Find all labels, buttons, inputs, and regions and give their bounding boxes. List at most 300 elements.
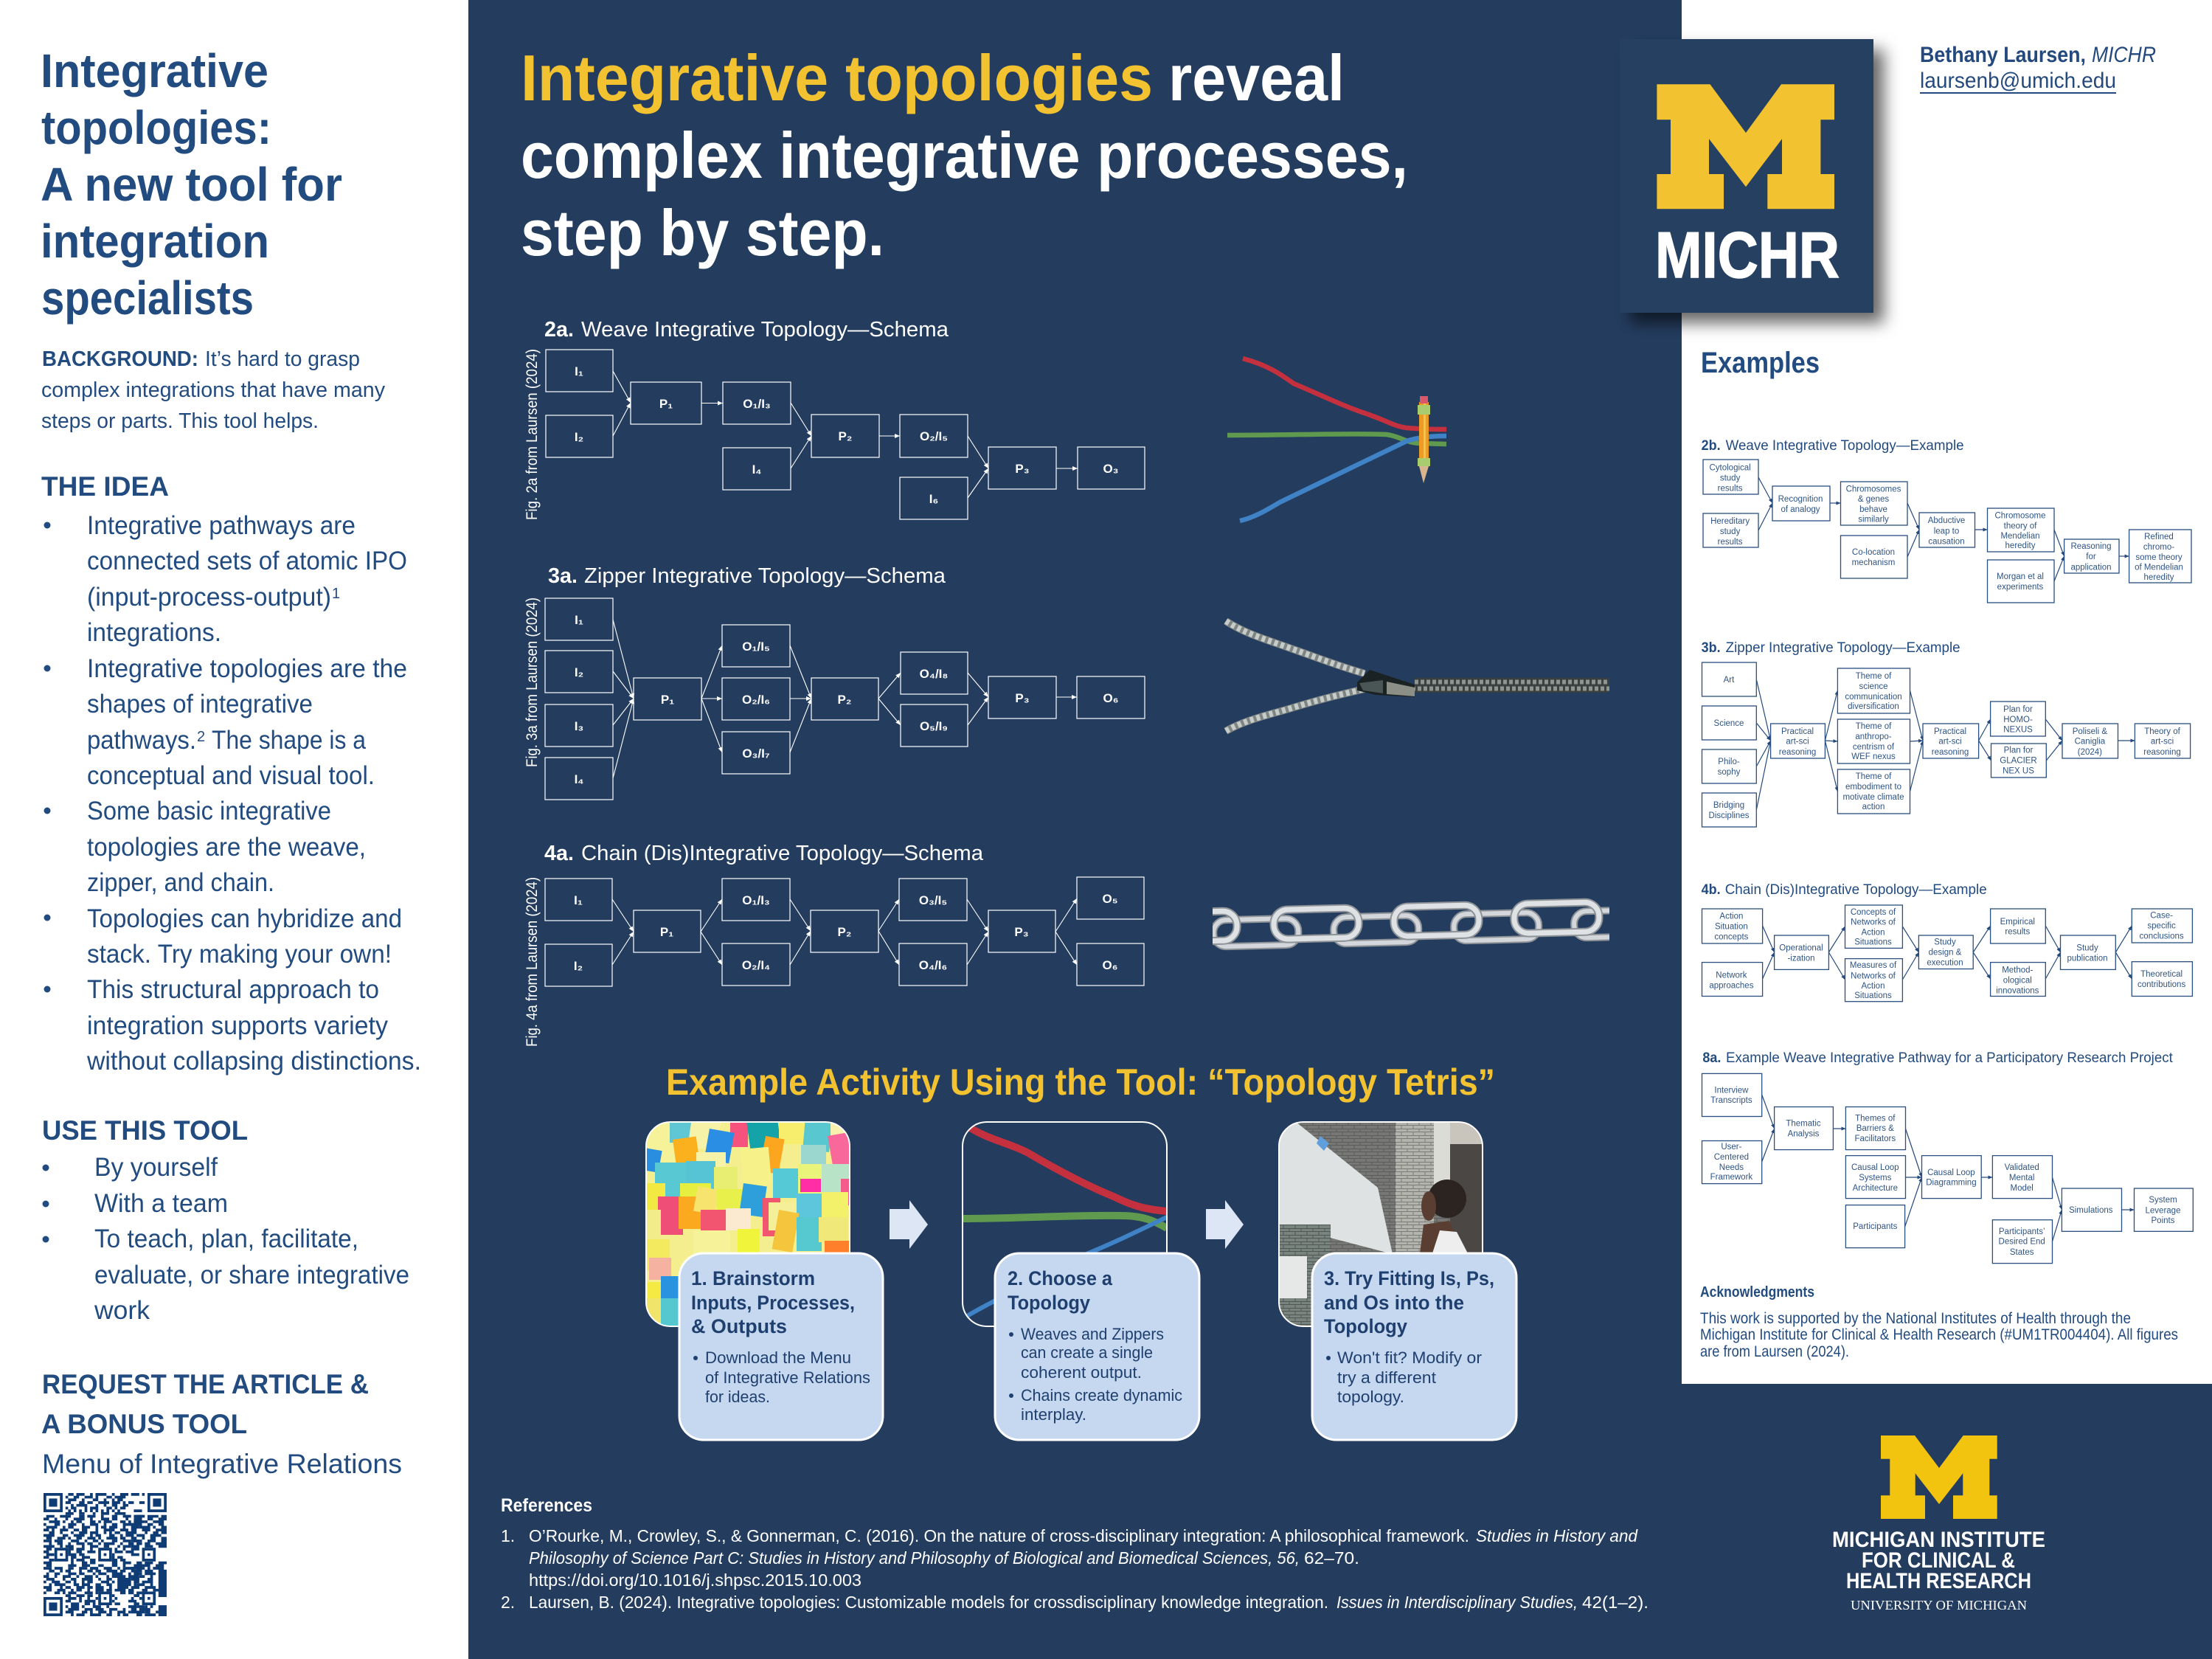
box practical 2: Practical [1934,727,1966,736]
image: zipper [1226,621,1609,731]
caption 8a: 8a. [1702,1050,1721,1066]
card 2: choose a topology [995,1253,1199,1440]
box methodological [1991,963,2045,996]
box glacier nexus: GLACIER [2000,757,2037,766]
box co-location: mechanism [1852,558,1895,567]
box science [1702,706,1756,740]
box O1/I3 [723,382,791,424]
box concepts: Situations [1854,938,1892,946]
box O1/I5: O₁/I₅ [742,640,770,654]
box morgan: Morgan et al [1997,572,2044,581]
box theory [2135,724,2191,758]
connectors 4b [1763,926,2132,980]
background text: complex integrations that have many [41,378,385,402]
box P2 [811,678,878,720]
the idea bullet list: Some basic integrative [87,797,331,825]
box bridging disciplines: Bridging [1713,801,1744,810]
card 1 heading [691,1267,855,1337]
reference 2: 2. [501,1593,515,1612]
reference 2: Laursen, B. (2024). Integrative topologies: Customizable models for crossdisciplinary knowledge integration. [529,1593,1328,1612]
figure 2b: weave example [1702,438,2191,603]
the idea bullet list: conceptual and visual tool. [87,761,375,790]
box interview [1702,1073,1762,1117]
headline: reveal [1168,41,1345,114]
box O5: O₅ [1102,892,1118,906]
box theme anthropocentrism: centrism of [1853,743,1895,752]
box O6 [1077,676,1145,718]
box reasoning: application [2071,564,2111,572]
box O1/I5 [722,625,790,667]
box O2/I4 [722,943,790,986]
box chromosomes: behave [1859,505,1887,514]
box P1 [631,382,701,424]
box theme embodiment: motivate climate [1842,793,1904,802]
box thematic [1775,1106,1833,1150]
heading: request the article [41,1369,369,1439]
box theme anthropocentrism [1837,719,1910,763]
caption 3b: 3b. [1702,640,1721,656]
reference 1: https://doi.org/10.1016/j.shpsc.2015.10.003 [529,1570,861,1590]
card 3 heading: 3. Try Fitting Is, Ps, [1324,1267,1494,1289]
box desired end states: States [2010,1248,2034,1257]
box bridging disciplines [1702,793,1756,827]
box case-specific [2132,909,2192,943]
left title: A new tool for [41,158,342,211]
reference 2: Issues in Interdisciplinary Studies, [1336,1593,1578,1612]
caption 3a: Zipper Integrative Topology—Schema [584,564,946,588]
box case-specific: Case- [2150,912,2173,921]
box O3/I5: O₃/I₅ [919,893,947,907]
box P2: P₂ [838,925,851,939]
box chromosomes: & genes [1858,495,1889,504]
arrow: step 2 to 3 [1206,1200,1244,1249]
the idea bullet list: Integrative topologies are the [87,654,407,683]
panel: left column [0,0,468,1659]
caption 4b: Chain (Dis)Integrative Topology—Example [1725,882,1987,898]
box O5/I9: O₅/I₉ [920,719,948,733]
box homo-nexus [1991,702,2045,736]
heading: request the article: A BONUS TOOL [41,1409,247,1439]
use this tool list: By yourself [94,1153,218,1182]
box causal loop diagramming [1922,1156,1981,1199]
box user-centered: Needs [1719,1163,1744,1172]
card 1 heading: Inputs, Processes, [691,1292,855,1314]
caption 4b: 4b. [1702,882,1721,898]
box network approaches: Network [1716,971,1747,980]
box themes: Facilitators [1854,1135,1896,1143]
box O2/I5 [900,415,968,457]
box I4: I₄ [575,772,583,786]
box methodological: ological [2003,977,2032,986]
background text: BACKGROUND: [42,347,198,371]
card 3 bullet: topology. [1337,1388,1404,1406]
logo: Michigan Institute: HEALTH RESEARCH [1846,1569,2031,1593]
text: menu of integrative relations: Menu of Integrative Relations [42,1449,402,1479]
box P3 [988,910,1055,952]
box causal loop diagramming: Causal Loop [1927,1168,1975,1177]
box I6: I₆ [929,492,938,506]
reference 1: O’Rourke, M., Crowley, S., & Gonnerman, C. (2016). On the nature of cross-disciplinary integration: A philosophical framework. [529,1526,1469,1545]
headline [521,41,1408,269]
logo: MICHR block: MICHR [1655,218,1840,291]
use this tool list [43,1153,409,1325]
box network approaches: approaches [1709,981,1754,990]
box P3: P₃ [1014,925,1029,939]
box theme embodiment: action [1862,803,1885,811]
card 2 heading: 2. Choose a [1008,1267,1113,1289]
image: chain [1213,898,1609,950]
box O4/I6: O₄/I₆ [919,958,947,972]
box I3: I₃ [575,719,583,733]
box thematic: Thematic [1786,1119,1821,1128]
box refined [2129,530,2191,583]
box system leverage: Leverage [2146,1206,2180,1215]
box concepts: Action [1862,928,1885,937]
card 2 bullets: coherent output. [1021,1363,1142,1382]
author block: laursenb@umich.edu [1920,69,2116,93]
box refined: some theory [2135,553,2182,562]
card 2 bullets [1009,1325,1182,1424]
box chromosome theory: heredity [2005,541,2036,550]
box validated: Model [2011,1184,2034,1193]
box concepts [1845,905,1902,948]
box theme embodiment: embodiment to [1845,783,1901,792]
left title [41,44,342,325]
figure 3b: zipper example [1702,640,2191,827]
caption 3a: 3a. [548,564,578,588]
box desired end states: Participants’ [1999,1227,2045,1236]
box abductive: Abductive [1928,516,1965,525]
reference 1: Studies in History and [1476,1526,1638,1545]
card 3 heading: Topology [1324,1315,1407,1337]
box O2/I4: O₂/I₄ [742,958,770,972]
box I4 [545,758,613,800]
box study publication: publication [2067,954,2107,963]
box empirical: Empirical [2000,918,2035,927]
reference 1: 62–70. [1304,1548,1359,1568]
the idea bullet list: (input-process-output) [87,583,331,612]
box methodological: Method- [2002,966,2034,974]
headline: complex integrative processes, [521,119,1408,192]
box O5 [1077,877,1144,919]
box practical 2: reasoning [1932,748,1969,757]
box O3/I5 [899,879,967,921]
box hereditary: results [1718,538,1743,547]
box network approaches [1702,963,1763,996]
the idea bullet list: 2 [197,729,205,745]
box co-location [1841,536,1907,578]
box study design: execution [1927,959,1963,968]
left title: Integrative [41,44,268,97]
box poliseli: (2024) [2078,748,2102,757]
box causal loop systems [1845,1156,1906,1199]
arrow: step 1 to 2 [890,1200,928,1249]
box morgan: experiments [1997,583,2044,592]
card 1 heading: & Outputs [691,1315,787,1337]
the idea bullet list: Integrative pathways are [87,511,356,540]
box causal loop systems: Causal Loop [1851,1163,1899,1172]
box validated: Mental [2009,1174,2034,1182]
figure 3a: zipper schema [524,564,1145,800]
logo: Michigan Institute: FOR CLINICAL & [1862,1548,2015,1573]
left title: integration [41,215,269,268]
box I2: I₂ [575,665,583,679]
box measures: Measures of [1850,961,1897,970]
box P3: P₃ [1015,462,1030,476]
box action situation: concepts [1714,932,1749,941]
box hereditary: study [1720,527,1741,536]
box P1 [634,910,701,952]
acknowledgments: are from Laursen (2024). [1700,1343,1849,1360]
box theory: reasoning [2143,748,2181,757]
box O6: O₆ [1103,958,1117,972]
box refined: Refined [2144,533,2174,541]
references [501,1495,1648,1612]
box cytological: study [1720,474,1741,482]
the idea bullet list: This structural approach to [87,975,379,1004]
box P3: P₃ [1015,691,1030,705]
box theory: art-sci [2151,738,2174,747]
box desired end states: Desired End [1999,1238,2045,1247]
box reasoning: for [2086,553,2096,561]
box concepts: Concepts of [1851,908,1896,917]
box study publication [2061,935,2115,969]
box themes: Barriers & [1856,1124,1894,1133]
acknowledgments [1700,1284,2178,1360]
box practical 1: Practical [1781,727,1814,736]
photo: sticky notes [641,1117,857,1326]
box theme science: science [1859,682,1888,691]
box O2/I6: O₂/I₆ [742,693,770,707]
box reasoning [2064,539,2119,573]
box theme science [1837,668,1910,713]
side label 4a: Fig. 4a from Laursen (2024) [524,877,541,1047]
card 1 bullet [693,1348,870,1406]
caption 3b: Zipper Integrative Topology—Example [1726,640,1960,656]
box theme science: diversification [1848,702,1899,711]
figure 8a: participatory pathway [1702,1050,2193,1264]
heading: examples: Examples [1701,347,1820,379]
box operationalization: Operational [1779,944,1823,953]
use this tool list: To teach, plan, facilitate, [94,1225,358,1253]
box chromosome theory: Chromosome [1994,512,2046,521]
box P3 [988,676,1056,718]
figure 4a: chain schema [524,842,1144,1047]
card 1 bullet: for ideas. [705,1388,770,1406]
card 2 heading [1008,1267,1113,1314]
reference 2: 42(1–2). [1582,1593,1648,1612]
card 3 heading [1324,1267,1494,1337]
the idea bullet list: shapes of integrative [87,690,313,718]
logo: Michigan Institute: MICHIGAN INSTITUTE [1832,1528,2045,1552]
headline: Integrative topologies [521,41,1153,114]
box poliseli [2062,724,2118,758]
connectors 3a [613,620,1077,778]
box homo-nexus: Plan for [2003,705,2033,714]
box participants: Participants [1853,1222,1898,1231]
box methodological: innovations [1996,987,2039,996]
caption 2a: 2a. [544,318,574,342]
box recognition: Recognition [1778,495,1823,504]
left title: specialists [41,271,254,325]
box I1: I₁ [575,364,583,378]
box I3 [545,704,613,747]
box O4/I8: O₄/I₈ [920,667,948,681]
box study publication: Study [2076,944,2098,953]
the idea bullet list: Topologies can hybridize and [87,904,402,933]
box I1 [545,879,612,921]
box system leverage: System [2149,1196,2177,1205]
box O3 [1078,447,1145,489]
the idea bullet list: connected sets of atomic IPO [87,547,407,575]
card 3 bullet [1326,1348,1482,1406]
card 3 bullet: Won't fit? Modify or [1337,1348,1482,1367]
box O4/I8 [901,652,968,694]
box I4: I₄ [752,463,761,477]
box refined: heredity [2144,573,2174,582]
box P2: P₂ [838,693,851,707]
box user-centered: Centered [1714,1153,1749,1162]
box poliseli: Caniglia [2075,738,2106,747]
box validated: Validated [2005,1163,2039,1172]
box desired end states [1992,1220,2052,1264]
box O1/I3 [722,879,790,921]
heading: request the article: REQUEST THE ARTICLE & [42,1369,369,1399]
box O3: O₃ [1103,462,1119,476]
card 2 bullets: Chains create dynamic [1021,1386,1182,1405]
box system leverage [2135,1188,2193,1231]
the idea bullet list: zipper, and chain. [87,868,274,897]
box P1: P₁ [661,693,674,707]
box thematic: Analysis [1788,1129,1820,1138]
connectors 3b [1756,679,2135,810]
box measures: Action [1862,982,1885,991]
box theme anthropocentrism: WEF nexus [1851,752,1896,761]
panel: right column [1682,0,2212,1384]
box theme anthropocentrism: Theme of [1856,722,1892,731]
box O3/I7: O₃/I₇ [742,747,770,761]
caption 8a: Example Weave Integrative Pathway for a Participatory Research Project [1726,1050,2174,1066]
use this tool list: evaluate, or share integrative [94,1261,409,1289]
box causal loop diagramming: Diagramming [1926,1178,1977,1187]
box operationalization [1775,935,1828,969]
references heading: References [501,1495,592,1516]
box philosophy: sophy [1718,768,1741,777]
connectors 4a [612,898,1077,965]
box practical 2 [1923,724,1979,758]
box practical 1 [1771,724,1825,758]
use this tool list: work [94,1296,150,1325]
box system leverage: Points [2152,1216,2175,1225]
box theoretical: contributions [2138,980,2185,989]
card 3 bullet: try a different [1337,1368,1436,1387]
box art [1702,662,1756,696]
box theme science: communication [1845,693,1902,702]
box P2 [811,910,878,952]
box action situation: Action [1719,912,1743,921]
reference 1: Philosophy of Science Part C: Studies in History and Philosophy of Biological and Biomedical Sciences, 56, [529,1548,1300,1568]
box abductive [1919,513,1975,547]
box study design: design & [1929,948,1962,957]
author block: Bethany Laursen, [1920,43,2086,67]
box abductive: leap to [1934,527,1959,536]
box study design: Study [1934,938,1956,946]
box causal loop systems: Systems [1859,1174,1892,1182]
box O1/I3: O₁/I₃ [742,893,770,907]
the idea bullet list: The shape is a [212,726,366,755]
image: weave ropes on pencil [1227,359,1446,521]
logo: Michigan Institute [1832,1435,2045,1613]
box O2/I5: O₂/I₅ [920,429,948,443]
box measures: Situations [1854,991,1892,1000]
box causal loop systems: Architecture [1853,1184,1898,1193]
caption 2b: 2b. [1702,438,1721,454]
box chromosomes [1841,482,1907,525]
box recognition [1772,486,1830,521]
box theoretical [2132,962,2192,996]
card 1: brainstorm [679,1253,883,1440]
box philosophy [1702,749,1756,783]
box case-specific: conclusions [2140,932,2184,941]
the idea bullet list: integration supports variety [87,1011,388,1040]
reference 1: 1. [501,1526,515,1545]
the idea bullet list: topologies are the weave, [87,833,366,862]
box science: Science [1714,719,1744,728]
box themes [1845,1106,1906,1150]
box philosophy: Philo- [1718,758,1740,766]
box user-centered: Framework [1710,1173,1752,1182]
box P1: P₁ [659,397,673,411]
box study design [1918,935,1973,969]
caption 2a: Weave Integrative Topology—Schema [581,318,949,342]
box I2 [545,944,612,986]
heading: use this tool: USE THIS TOOL [42,1115,248,1146]
box theme embodiment: Theme of [1856,772,1892,781]
box O6 [1077,943,1144,986]
box I1: I₁ [574,893,583,907]
box O4/I6 [899,943,967,986]
box I2: I₂ [574,959,583,973]
box chromosomes: similarly [1858,515,1889,524]
box co-location: Co-location [1852,548,1895,557]
box bridging disciplines: Disciplines [1709,811,1750,820]
card 2 bullets: Weaves and Zippers [1021,1325,1164,1343]
left title: topologies: [41,101,271,154]
card 3 heading: and Os into the [1324,1292,1464,1314]
box I2 [545,651,613,693]
card 2 heading: Topology [1008,1292,1090,1314]
box cytological: Cytological [1709,463,1751,472]
box themes: Themes of [1855,1114,1896,1123]
box case-specific: specific [2147,922,2176,931]
box O3/I7 [722,732,790,774]
heading: the idea: THE IDEA [41,471,169,502]
box user-centered [1702,1140,1762,1184]
the idea bullet list: 1 [332,586,340,602]
box I1 [545,598,613,640]
caption 2b: Weave Integrative Topology—Example [1726,438,1964,454]
box practical 1: reasoning [1779,748,1816,757]
box theme science: Theme of [1856,672,1892,681]
box refined: chromo- [2143,543,2174,552]
box I4 [723,448,791,490]
background text: steps or parts. This tool helps. [41,409,319,433]
box cytological: results [1718,484,1743,493]
box P3 [988,447,1056,489]
background text [41,347,385,433]
logo: MICHR block [1620,39,1873,313]
box concepts: Networks of [1851,918,1896,927]
